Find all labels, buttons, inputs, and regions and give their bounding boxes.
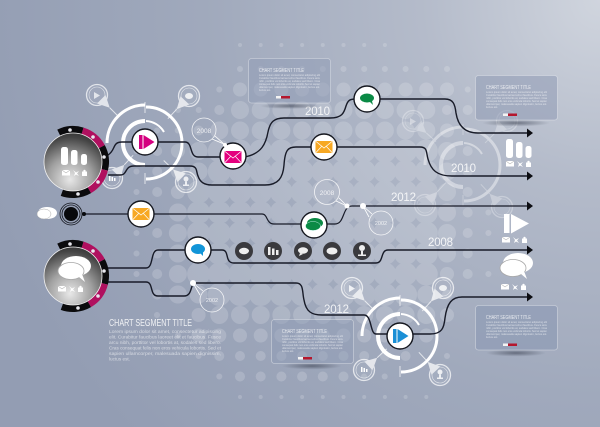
panel: right bottom info box: Curabitur faucibus laoreet elit et faucibus. Fusce arcu <box>486 323 548 327</box>
text block: chart segment title and body: arcu nibh, porttitor vel lobortis at, sodales sed libero. <box>109 340 221 345</box>
node: orange envelope lower <box>128 201 154 227</box>
text block: chart segment title and body: sapien ullamcorper, malesuada sapien dignissim, <box>109 351 221 356</box>
target ring: right faded <box>398 106 522 222</box>
panel: right top info box: Curabitur faucibus laoreet elit et faucibus. Fusce arcu <box>486 93 548 97</box>
target ring: bottom <box>337 273 458 390</box>
panel: bottom center info box <box>272 320 354 370</box>
panel: right top info box: luctus est. <box>486 105 498 109</box>
callout: 2008 top <box>192 118 227 147</box>
callout: 2008 middle: 2008 <box>320 190 335 197</box>
panel: bottom center info box: consequat felis non eros vehicula lobortis. Sed et sapien <box>282 343 344 347</box>
panel: top info box: consequat felis non eros vehicula lobortis. Sed et sapien <box>259 82 321 86</box>
halftone dot field <box>136 45 489 397</box>
callout: 2002 middle: 2002 <box>375 221 387 227</box>
node: pink play <box>132 129 158 155</box>
panel: bottom center info box: luctus est. <box>282 349 294 353</box>
panel: right top info box: nibh, porttitor vel lobortis at, sodales sed libero. Cras <box>486 96 548 100</box>
panel: right bottom info box: nibh, porttitor vel lobortis at, sodales sed libero. Cras <box>486 326 548 330</box>
arrowheads <box>527 128 533 302</box>
node: blue play <box>387 323 413 349</box>
callout: 2002 middle <box>360 203 393 235</box>
year labels: 2008 <box>428 237 453 249</box>
right icon: bars <box>506 139 532 167</box>
panel: right bottom info box <box>476 306 558 356</box>
text block: chart segment title and body: luctus est. <box>109 356 130 362</box>
panel: right bottom info box: CHART SEGMENT TITLE <box>486 315 532 321</box>
year labels <box>305 106 476 316</box>
panel: bottom center info box: Lorem ipsum dolor sit amet, consectetur adipiscing elit <box>282 334 343 338</box>
text block: chart segment title and body: Lorem ipsum dolor sit amet, consectetur adipiscing <box>109 329 221 334</box>
year labels: 2012 <box>324 304 349 316</box>
text block: chart segment title and body: CHART SEGMENT TITLE <box>109 318 192 329</box>
target node with speech icon <box>37 203 86 225</box>
target ring: left top <box>82 80 204 197</box>
panel: top info box: Lorem ipsum dolor sit amet, consectetur adipiscing elit <box>259 73 320 77</box>
node: pink envelope <box>220 143 246 169</box>
right icon: speech <box>500 253 533 290</box>
panel: right bottom info box: Lorem ipsum dolor sit amet, consectetur adipiscing elit <box>486 320 547 324</box>
panel: bottom center info box: ullamcorper, malesuada sapien dignissim, luctus est. <box>282 346 343 350</box>
node: blue speech <box>185 237 211 263</box>
panel: right top info box: ullamcorper, malesuada sapien dignissim, luctus est. <box>486 102 547 106</box>
panel: right top info box <box>476 76 558 126</box>
text block: chart segment title and body: Cras consequat felis non eros vehicula lobortis. Sed et <box>109 346 222 350</box>
panel: bottom center info box: Curabitur faucibus laoreet elit et faucibus. Fusce arcu <box>282 337 344 341</box>
node: green speech <box>354 86 380 112</box>
panel: right top info box: consequat felis non eros vehicula lobortis. Sed et sapien <box>486 99 548 103</box>
callout: 2008 top: 2008 <box>197 128 212 135</box>
dark icon row <box>235 242 371 260</box>
panel: right bottom info box: ullamcorper, malesuada sapien dignissim, luctus est. <box>486 332 547 336</box>
text block: chart segment title and body <box>109 318 222 362</box>
node: green double speech <box>301 212 327 238</box>
panel: top info box: CHART SEGMENT TITLE <box>259 68 305 74</box>
panel: top info box: nibh, porttitor vel lobortis at, sodales sed libero. Cras <box>259 79 321 83</box>
connector lines <box>84 99 528 334</box>
panel: top info box <box>248 58 330 109</box>
panel: right top info box: Lorem ipsum dolor sit amet, consectetur adipiscing elit <box>486 90 547 94</box>
callout: 2002 lower: 2002 <box>206 298 218 304</box>
node: orange envelope upper <box>311 134 337 160</box>
text block: chart segment title and body: elit. Curabitur faucibus laoreet elit et faucibus. Fusce <box>109 334 221 340</box>
panel: bottom center info box: nibh, porttitor vel lobortis at, sodales sed libero. Cras <box>282 340 344 344</box>
year labels: 2012 <box>391 192 416 204</box>
left disc 1 with bar icon <box>44 128 106 196</box>
callout: 2008 middle <box>314 180 350 208</box>
year labels: 2010 <box>451 163 476 175</box>
panel: top info box: ullamcorper, malesuada sapien dignissim, luctus est. <box>259 85 320 89</box>
right icon: play <box>502 214 529 243</box>
panel: right bottom info box: consequat felis non eros vehicula lobortis. Sed et sapien <box>486 329 548 333</box>
panel: top info box: Curabitur faucibus laoreet elit et faucibus. Fusce arcu <box>259 76 321 80</box>
panel: top info box: luctus est. <box>259 88 271 92</box>
left disc 2 with speech icon <box>44 242 106 310</box>
callout: 2002 lower <box>190 280 224 312</box>
panel: right bottom info box: luctus est. <box>486 335 498 339</box>
panel: right top info box: CHART SEGMENT TITLE <box>486 85 532 91</box>
panel: bottom center info box: CHART SEGMENT TITLE <box>282 329 328 335</box>
year labels: 2010 <box>305 106 330 118</box>
